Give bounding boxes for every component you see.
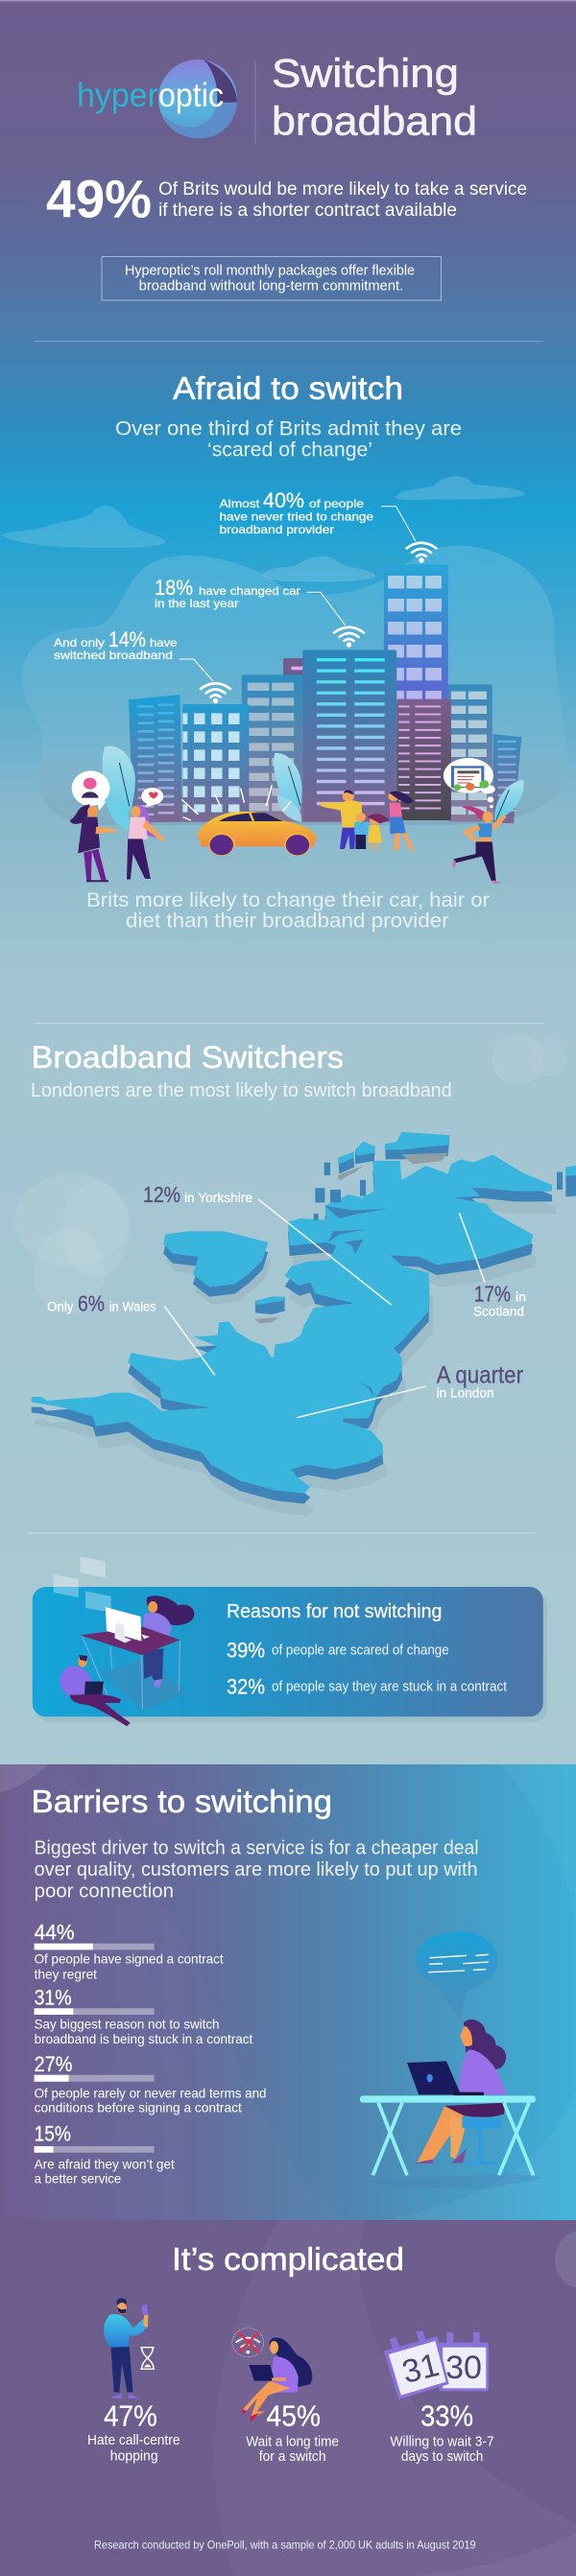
heading: broadband switchers: Broadband Switchers [31,1040,344,1075]
stat: 47%: hopping [110,2448,158,2464]
text: brits more likely to change: Brits more likely to change their car, hair or [86,889,490,911]
stat: 45%: for a switch [259,2449,326,2465]
heading: broadband switchers [31,1040,452,1101]
footer source note: Research conducted by OnePoll, with a sample of 2,000 UK adults in August 2019 [94,2539,476,2552]
callout: 14% switched broadband [54,627,213,681]
stat: 15% [35,2122,175,2186]
title: Switching [272,50,459,96]
callout: almost 40%: 40% [263,488,304,512]
label: wales [47,1291,156,1316]
callout: roll monthly packages [102,257,442,300]
logo: hyperoptic: hyper [77,77,158,114]
headline stat: 49% [46,169,527,228]
title [272,50,477,144]
stat: 44% [35,1921,224,1981]
stat: 27%: conditions before signing a contract [35,2100,242,2115]
illustration: woman at laptop with speech bubble [360,1932,543,2189]
Ireland and Isle of Man [163,1231,285,1323]
label: london: A quarter [437,1362,523,1389]
family [320,790,415,851]
intro text: over quality, customers are more likely to put up with [35,1859,478,1880]
stat: 15%: a better service [35,2171,121,2186]
callout: almost 40%: Almost [219,497,260,510]
stat: 15%: 15% [35,2122,71,2146]
headline stat: 49%: if there is a shorter contract available [158,201,457,221]
callout: almost 40%: have never tried to change [219,510,373,524]
woman two [127,804,165,880]
card text: Reasons for not switching [227,1601,442,1622]
wifi icon: centre building [334,627,364,646]
label: scotland: 17% [474,1282,511,1307]
stat: 45% [246,2399,339,2465]
headline stat: 49%: Of Brits would be more likely to take a service [158,179,527,200]
northern and western islands [314,1132,576,1220]
subheading: scared of change: Over one third of Brits admit they are [115,418,462,439]
callout: roll monthly packages: Hyperoptic’s roll monthly packages offer flexible [125,263,415,278]
stat: 44%: 44% [35,1921,75,1945]
callout: almost 40%: of people [309,497,364,510]
panel: reasons for not switching [33,1556,547,1726]
callout: roll monthly packages: broadband without long-term commitment. [139,278,403,294]
subheading: scared of change [115,418,462,461]
label: yorkshire: in Yorkshire [184,1191,252,1205]
callout: 18% changed car: in the last year [155,597,238,610]
illustration: calendars: 30 [445,2350,482,2386]
panel: reasons for not switching: 39% [227,1639,265,1663]
bokeh lights [14,1034,566,1314]
illustration: people at desk [54,1556,194,1726]
subheading: scared of change: ‘scared of change’ [207,439,372,461]
stat: 33% [390,2399,494,2465]
car [198,812,317,856]
leader lines [164,1199,485,1418]
callout: 14% switched broadband: And only [54,636,105,650]
stat: 31% [35,1985,252,2046]
logo: hyperoptic [77,59,237,138]
plants [103,746,524,830]
stat: 33%: days to switch [401,2449,483,2465]
stat: 47%: Hate call-centre [87,2433,180,2448]
page background: purple to blue to pale teal [0,0,576,1764]
illustration: woman with laptop and no wifi [232,2328,312,2422]
label: wales: in Wales [109,1299,156,1314]
wifi icon: tall building [407,543,436,561]
callout: 14% switched broadband: have [150,636,178,650]
stat: 27% [35,2052,266,2115]
label: scotland: in [516,1290,526,1305]
text: brits more likely to change [86,889,490,933]
heading: Barriers to switching [31,1784,332,1819]
stat: 31%: broadband is being stuck in a contract [35,2031,252,2046]
illustration: calendars [384,2330,489,2399]
callout: 18% changed car [155,576,346,626]
stat: 27%: Of people rarely or never read terms and [35,2085,266,2100]
callout: 14% switched broadband: 14% [108,627,146,651]
label: scotland [473,1282,526,1319]
illustration: calendars: 31 [398,2347,443,2391]
stat: 47%: 47% [104,2399,157,2432]
callout: almost 40%: broadband provider [219,523,334,536]
callout: 14% switched broadband: switched broadband [54,649,173,662]
woman one [70,804,116,882]
heading: It’s complicated [172,2241,404,2277]
label: scotland: Scotland [473,1305,524,1319]
heading: afraid to switch: Afraid to switch [173,370,403,406]
stat: 31%: Say biggest reason not to switch [35,2016,219,2031]
stat: 27%: 27% [35,2052,72,2076]
panel: barriers to switching [0,1764,576,2220]
headline stat: 49%: 49% [46,169,152,228]
text: brits more likely to change: diet than their broadband provider [126,910,449,933]
panel: reasons for not switching: of people say they are stuck in a contract [272,1679,507,1694]
stat: 15%: Are afraid they won’t get [35,2156,175,2171]
buildings [129,564,521,823]
stat: 33%: Willing to wait 3-7 [390,2434,494,2449]
thought bubble: diet plan [444,758,495,808]
stat: 44%: Of people have signed a contract [35,1951,224,1967]
label: london: in London [437,1386,494,1401]
callout: almost 40% [219,488,416,541]
stat: 47% [87,2399,180,2464]
heading: broadband switchers: Londoners are the most likely to switch broadband [31,1080,452,1101]
intro text: Biggest driver to switch a service is for a cheaper deal [35,1837,479,1858]
panel: reasons for not switching: of people are scared of change [272,1643,449,1659]
city scene [0,476,565,884]
illustration: man with phone and hourglass [104,2298,155,2399]
wifi icon: left building [201,683,230,702]
motion lines [181,785,291,820]
clouds and backdrop blob [0,476,565,825]
label: yorkshire: 12% [143,1182,180,1207]
stat: 44%: they regret [35,1966,97,1981]
panel: it's complicated [0,2220,576,2576]
callout: 18% changed car: have changed car [199,584,300,598]
Great Britain [32,1132,576,1516]
label: wales: Only [47,1299,74,1314]
intro text: poor connection [35,1881,174,1902]
label: yorkshire [143,1182,252,1207]
logo: hyperoptic: optic [158,77,224,114]
stat: 45%: 45% [267,2399,321,2432]
stat: 45%: Wait a long time [246,2434,339,2449]
callout: 18% changed car: 18% [155,576,193,600]
stat: 33%: 33% [420,2399,473,2432]
stat: 31%: 31% [35,1985,72,2009]
map: UK and Ireland [32,1132,576,1516]
panel: reasons for not switching: 32% [227,1675,265,1699]
runner [452,806,506,884]
title: broadband [272,98,477,144]
label: wales: 6% [78,1291,105,1316]
intro text [35,1837,479,1902]
label: london [437,1362,523,1401]
speech bubble: friend [72,770,163,811]
